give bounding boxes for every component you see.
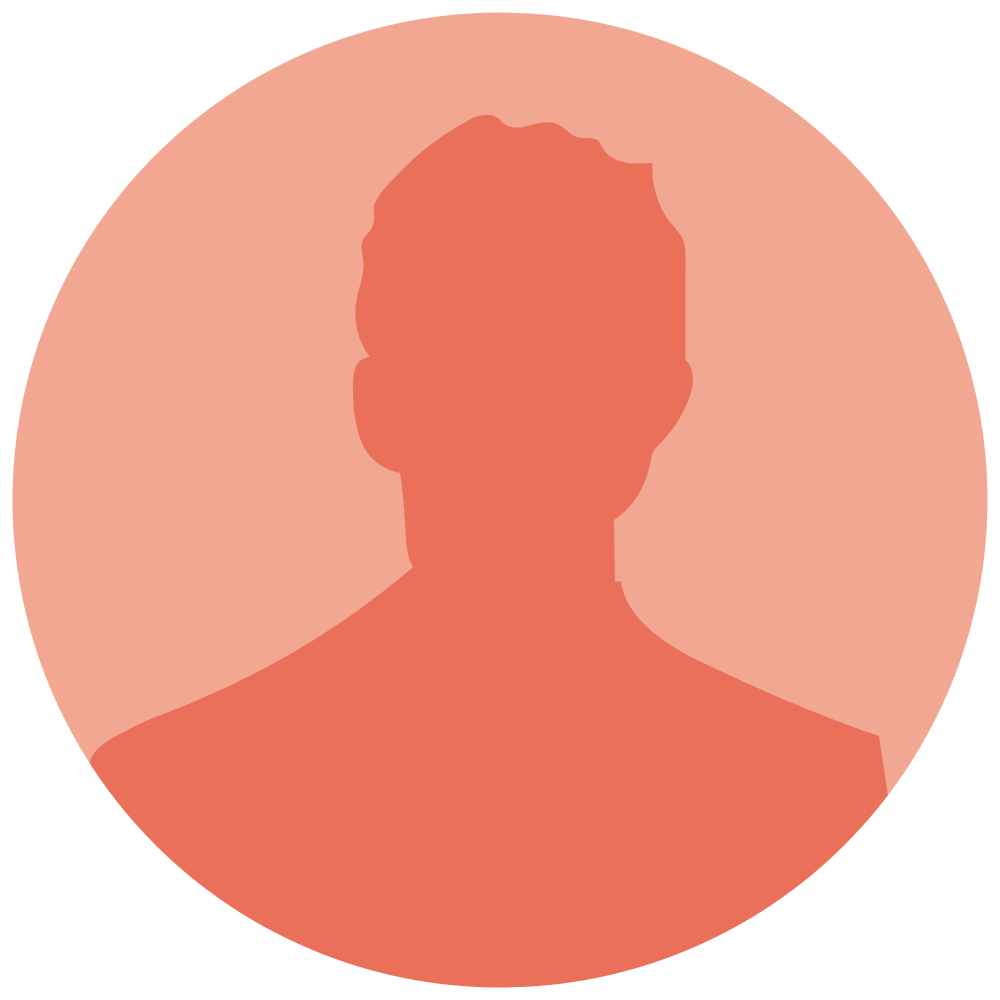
- person silhouette: [90, 115, 888, 1000]
